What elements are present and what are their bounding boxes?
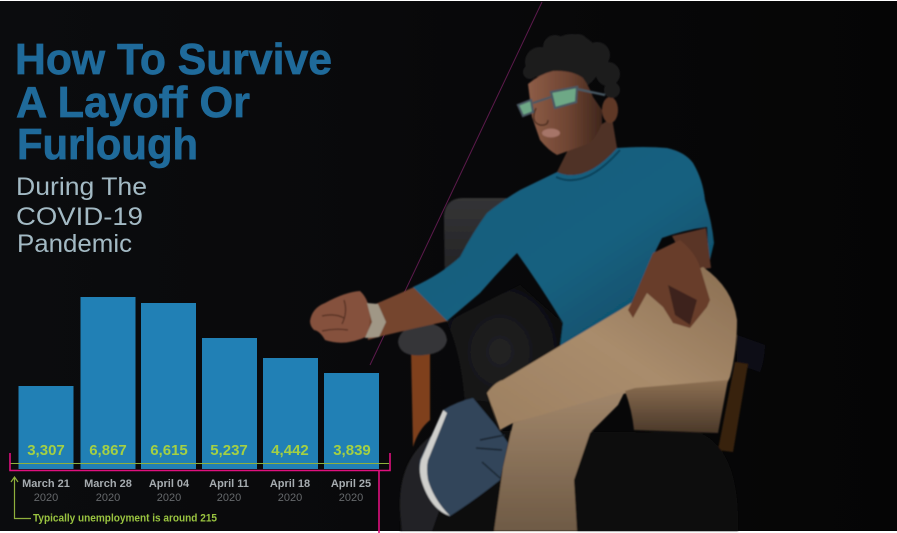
bar values: 4,442 xyxy=(271,442,309,459)
photo: seated man in chair xyxy=(310,34,765,531)
chair inner cushion xyxy=(447,285,565,418)
lips xyxy=(542,128,560,138)
subtitle: Pandemic xyxy=(17,230,132,258)
date labels: April 11 xyxy=(209,478,249,490)
title: How To Survive xyxy=(15,35,332,84)
year labels: 2020 xyxy=(217,492,241,504)
date labels: April 25 xyxy=(331,478,371,490)
chair back xyxy=(444,198,520,295)
baseline: typical unemployment xyxy=(10,462,389,464)
fist xyxy=(310,291,370,343)
chair left wood leg xyxy=(411,350,430,447)
shoe sole xyxy=(420,410,450,516)
title: A Layoff Or xyxy=(16,78,250,127)
watch xyxy=(365,303,386,338)
bar values: 5,237 xyxy=(210,442,248,459)
chair right wood leg xyxy=(718,362,748,452)
fist finger creases xyxy=(322,300,348,331)
subtitle: COVID-19 xyxy=(16,203,143,231)
arrow: unemployment callout xyxy=(11,477,31,518)
neck xyxy=(557,118,617,175)
bar values: 6,615 xyxy=(150,442,188,459)
lower leg xyxy=(494,391,625,531)
decorative diagonal line xyxy=(370,2,542,365)
hand xyxy=(628,240,710,328)
pink bracket xyxy=(10,453,390,533)
ear xyxy=(602,97,618,123)
date labels: April 18 xyxy=(270,478,310,490)
right forearm xyxy=(672,228,711,270)
year labels: 2020 xyxy=(278,492,302,504)
subtitle: During The xyxy=(16,173,147,201)
bar values: 6,867 xyxy=(89,442,127,459)
title xyxy=(15,35,332,169)
glasses xyxy=(518,87,605,116)
date labels xyxy=(22,478,371,490)
shoe laces xyxy=(476,435,505,478)
title: Furlough xyxy=(17,120,198,169)
hair xyxy=(523,34,620,98)
date labels: April 04 xyxy=(149,478,190,490)
hand shadows xyxy=(668,285,697,325)
year labels: 2020 xyxy=(34,492,58,504)
callout: typical unemployment: Typically unemployment is around 215 xyxy=(33,512,217,524)
shoe xyxy=(419,398,508,516)
collar shade xyxy=(556,150,620,180)
chair left arm pad xyxy=(398,323,447,355)
bars xyxy=(18,297,379,469)
bar values xyxy=(27,442,371,459)
face xyxy=(528,71,602,155)
chair seat xyxy=(400,430,738,531)
nose shade xyxy=(534,108,548,125)
bar values: 3,307 xyxy=(27,442,65,459)
left forearm xyxy=(366,287,448,340)
date labels: March 28 xyxy=(84,478,132,490)
year labels: 2020 xyxy=(96,492,120,504)
year labels: 2020 xyxy=(157,492,181,504)
year labels: 2020 xyxy=(339,492,363,504)
bar chart xyxy=(10,297,390,533)
back of thigh xyxy=(625,380,728,433)
bar values: 3,839 xyxy=(333,442,371,459)
year labels xyxy=(34,492,363,504)
date labels: March 21 xyxy=(22,478,70,490)
chair seat left shade xyxy=(400,430,462,531)
chair right arm xyxy=(737,335,765,372)
upper leg xyxy=(487,267,737,430)
shirt xyxy=(413,147,714,347)
sock xyxy=(473,400,497,427)
subtitle xyxy=(16,173,147,258)
